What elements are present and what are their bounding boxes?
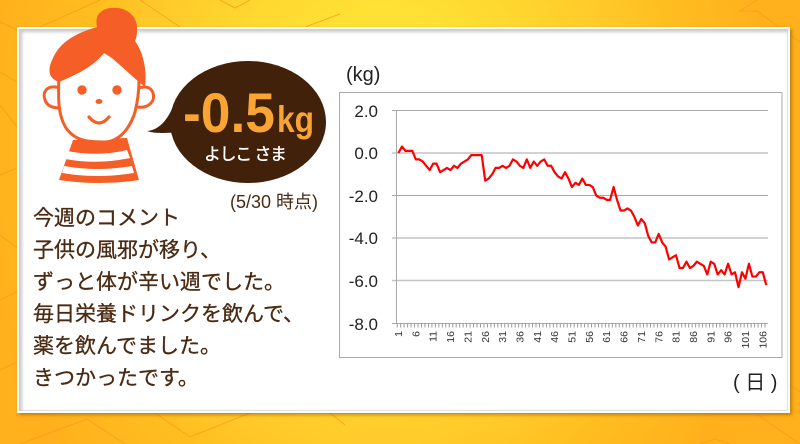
x axis labels: 61 <box>601 331 613 343</box>
x axis labels: 1 <box>393 331 405 337</box>
comment text block: 薬を飲んでました。 <box>33 335 221 358</box>
x axis labels: 41 <box>532 331 544 343</box>
comment text block: きつかったです。 <box>33 367 199 390</box>
x axis labels: 11 <box>428 331 440 342</box>
x axis labels: 56 <box>584 331 596 343</box>
y axis unit: (kg) <box>346 64 380 86</box>
x axis labels: 101 <box>740 331 752 349</box>
ears <box>44 87 60 108</box>
hair and bun <box>49 8 146 87</box>
x axis labels: 6 <box>410 331 422 337</box>
comment text block: 今週のコメント <box>33 207 180 230</box>
face <box>59 50 139 142</box>
smile <box>89 117 109 123</box>
y axis labels: -8.0 <box>349 315 378 334</box>
date note: (5/30 時点) <box>230 192 318 212</box>
comment text block: 子供の風邪が移り、 <box>33 239 221 262</box>
y axis labels: -6.0 <box>349 272 378 291</box>
x axis labels: 76 <box>653 331 665 343</box>
x axis labels: 46 <box>549 331 561 343</box>
y axis labels: -4.0 <box>349 229 378 248</box>
x axis labels: 66 <box>619 331 631 343</box>
x axis labels: 86 <box>688 331 700 343</box>
y axis labels: -2.0 <box>349 187 378 206</box>
chart frame <box>340 92 782 358</box>
x axis labels <box>393 331 769 349</box>
x axis labels: 26 <box>480 331 492 343</box>
shirt <box>59 138 139 183</box>
x axis labels: 16 <box>445 331 457 343</box>
comment text block <box>33 206 304 390</box>
x axis labels: 106 <box>757 331 769 349</box>
y axis labels <box>349 102 378 334</box>
icon: woman with hair bun and striped shirt <box>42 8 155 183</box>
x axis unit: ( 日 ) <box>733 372 777 394</box>
x axis labels: 31 <box>497 331 509 343</box>
unit: kg <box>277 99 314 140</box>
weight change value: -0.5 <box>183 81 275 144</box>
x axis labels: 81 <box>671 331 683 343</box>
y axis labels: 2.0 <box>354 102 378 121</box>
comment text block: ずっと体が辛い週でした。 <box>33 271 285 294</box>
x axis labels: 21 <box>462 331 474 343</box>
x axis labels: 96 <box>723 331 735 343</box>
x axis labels: 51 <box>566 331 578 343</box>
data line <box>398 147 766 287</box>
x axis labels: 91 <box>705 331 717 343</box>
y axis labels: 0.0 <box>354 144 378 163</box>
x axis labels: 71 <box>636 331 648 343</box>
eyes and nose <box>77 85 87 95</box>
x axis labels: 36 <box>514 331 526 343</box>
comment text block: 毎日栄養ドリンクを飲んで、 <box>33 303 304 326</box>
name: よしこ さま <box>204 145 287 164</box>
